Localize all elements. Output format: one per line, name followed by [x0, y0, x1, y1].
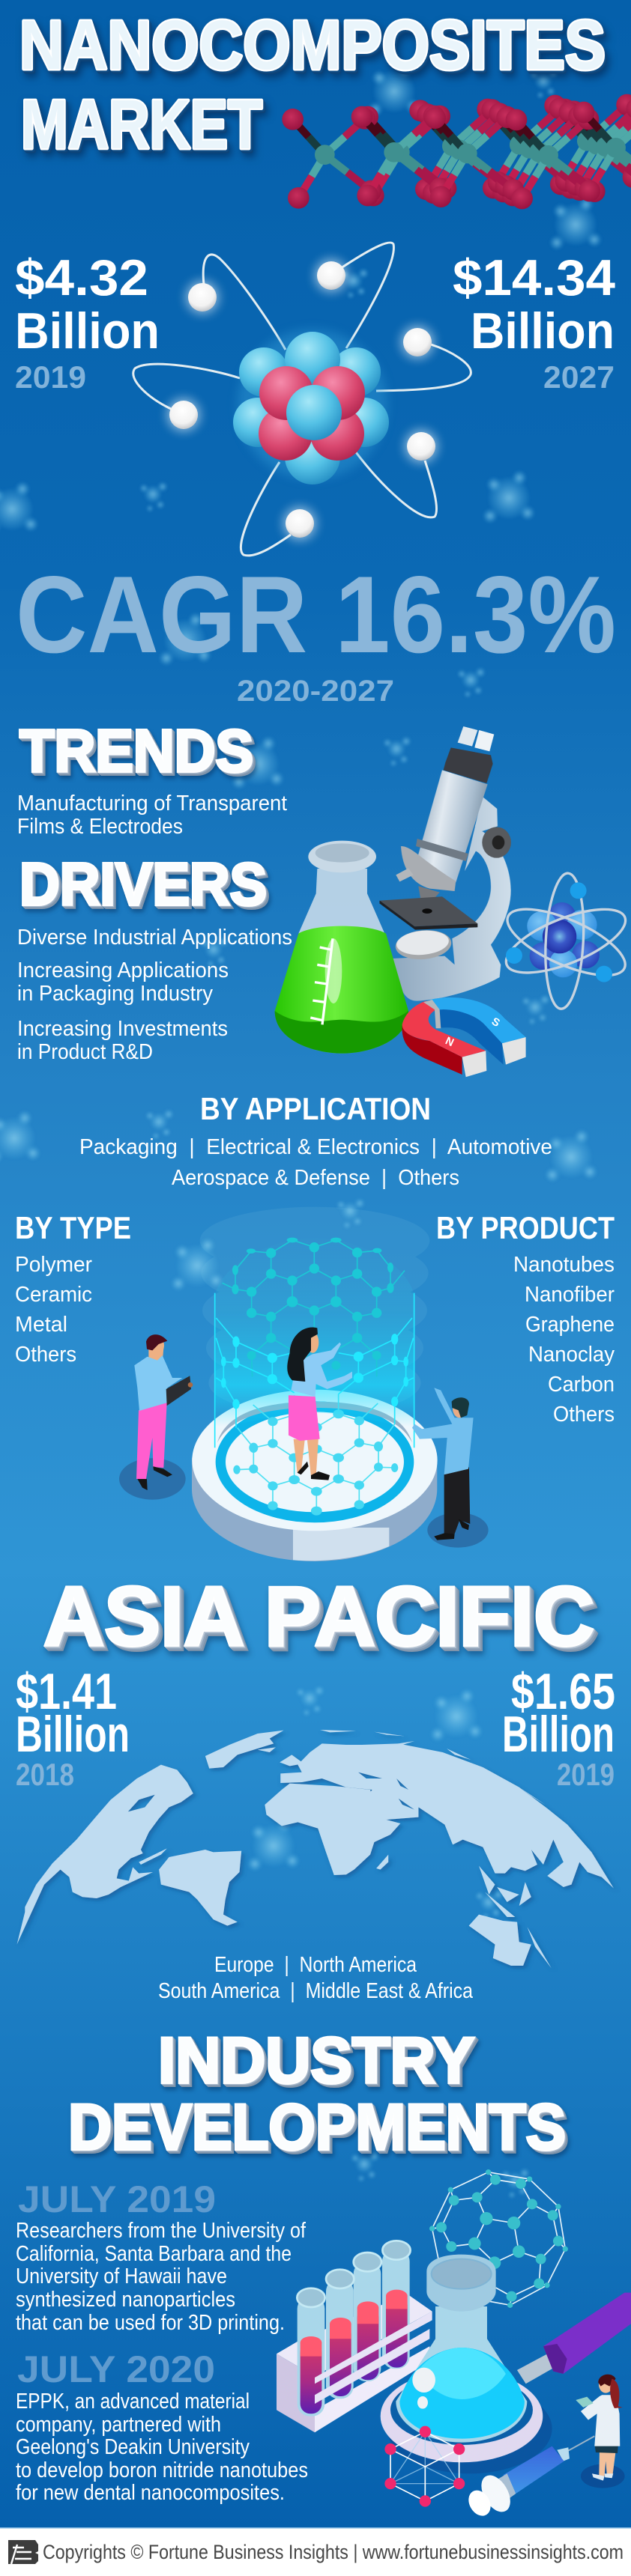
by product: Others	[553, 1403, 615, 1427]
development: July 2020: to develop boron nitride nanotubes	[16, 2458, 308, 2482]
by type	[15, 1210, 131, 1367]
stat: 2027 market size: $14.34	[453, 249, 615, 306]
crystal molecule illustration	[282, 94, 631, 209]
stat: 2018 regional size: $1.41	[16, 1663, 117, 1720]
drivers list	[17, 926, 292, 1064]
drivers list: Increasing Applications	[17, 959, 229, 982]
icon: syringe	[464, 2436, 594, 2520]
drivers list: Increasing Investments	[17, 1017, 228, 1041]
heading: drivers: DRIVERS	[19, 851, 267, 917]
development: July 2020: EPPK, an advanced material	[16, 2390, 250, 2414]
footer	[0, 2527, 631, 2576]
stat: 2027 market size: Billion	[471, 303, 615, 359]
title	[19, 6, 606, 163]
icon: scientist	[576, 2375, 625, 2488]
trends text	[17, 792, 287, 839]
development: July 2020: company, partnered with	[16, 2413, 221, 2437]
by type: Others	[15, 1343, 76, 1367]
icon: green flask	[275, 841, 408, 1054]
stat: 2019 market size	[15, 249, 160, 395]
trends text: Manufacturing of Transparent	[17, 792, 287, 815]
drivers list: Diverse Industrial Applications	[17, 926, 292, 950]
icon: crystal lattice	[384, 2426, 465, 2507]
CAGR period: 2020-2027	[237, 675, 394, 708]
by product: Graphene	[525, 1313, 615, 1337]
development: July 2020	[16, 2348, 308, 2505]
icon: blue atom	[498, 872, 631, 1009]
lab illustration: microscope, flask, magnet, atom	[275, 726, 631, 1077]
stat: 2018 regional size: Billion	[16, 1706, 130, 1763]
development: July 2019: that can be used for 3D printing.	[16, 2311, 285, 2335]
development: July 2019: California, Santa Barbara and the	[16, 2242, 292, 2266]
world map	[17, 1730, 614, 1968]
development: July 2019: synthesized nanoparticles	[16, 2288, 235, 2312]
stat: 2027 market size	[453, 249, 615, 395]
magnet pole labels: N	[444, 1035, 456, 1049]
stat: 2019 market size: Billion	[15, 303, 160, 359]
by product: Nanotubes	[513, 1253, 615, 1277]
by type: BY TYPE	[15, 1210, 131, 1245]
by product: Nanoclay	[528, 1343, 615, 1367]
by application: Packaging | Electrical & Electronics | Automotive	[79, 1135, 552, 1159]
lab illustration: test tubes, flask, buckyball, syringe, scientist	[277, 2169, 631, 2520]
development: July 2019: Researchers from the University of	[16, 2219, 307, 2243]
magnet pole labels: S	[489, 1015, 502, 1030]
drivers list: in Packaging Industry	[17, 982, 213, 1006]
drivers list: in Product R&D	[17, 1040, 153, 1064]
background molecule decorations	[0, 64, 601, 2198]
person: woman	[287, 1327, 352, 1480]
icon: company logo	[8, 2540, 38, 2564]
heading: Industry Developments: DEVELOPMENTS	[68, 2092, 566, 2163]
development: July 2019: JULY 2019	[18, 2178, 216, 2220]
by product: Nanofiber	[525, 1283, 615, 1307]
icon: horseshoe magnet	[402, 997, 526, 1077]
icon: purple magnifier handle	[517, 2293, 631, 2384]
by application: Aerospace & Defense | Others	[172, 1166, 459, 1190]
heading: Industry Developments: INDUSTRY	[158, 2025, 474, 2097]
icon: test tube rack	[277, 2241, 432, 2432]
regions list: South America | Middle East & Africa	[158, 1979, 474, 2003]
by product: Carbon	[548, 1373, 615, 1397]
development: July 2020: Geelong's Deakin University	[16, 2435, 250, 2459]
by type: Polymer	[15, 1253, 92, 1277]
regions list	[158, 1953, 474, 2003]
stat: 2018 regional size	[16, 1663, 130, 1792]
tube hexagon net: back layer	[223, 1238, 405, 1383]
icon: microscope	[380, 726, 511, 1001]
by application: BY APPLICATION	[200, 1091, 431, 1126]
development: July 2020: JULY 2020	[17, 2348, 215, 2390]
trends text: Films & Electrodes	[17, 815, 183, 839]
icon: buckyball	[429, 2169, 568, 2308]
stat: 2019 regional size: 2019	[557, 1757, 615, 1792]
tube hexagon net: front layer	[215, 1293, 414, 1448]
heading: trends: TRENDS	[19, 717, 253, 784]
by type: Ceramic	[15, 1283, 92, 1307]
floor hexagon net	[233, 1394, 398, 1516]
development: July 2019	[16, 2178, 307, 2335]
stat: 2019 market size: 2019	[15, 359, 86, 395]
by product	[436, 1210, 615, 1427]
icon: atom	[133, 243, 471, 556]
by type: Metal	[15, 1313, 67, 1337]
regions list: Europe | North America	[214, 1953, 417, 1977]
person: man at right	[412, 1388, 489, 1548]
heading: Industry Developments	[68, 2025, 566, 2163]
icon: blue round flask in magnifier	[381, 2255, 552, 2473]
stat: 2019 regional size	[502, 1663, 615, 1792]
heading: Asia Pacific: ASIA PACIFIC	[43, 1570, 594, 1663]
magnet pole labels	[444, 1015, 502, 1049]
person: man with tablet	[119, 1334, 193, 1500]
title: MARKET	[21, 85, 262, 163]
stat: 2027 market size: 2027	[543, 359, 615, 395]
nanotube platform illustration	[119, 1207, 489, 1561]
by application	[79, 1091, 552, 1190]
development: July 2020: for new dental nanocomposites.	[16, 2481, 285, 2505]
stat: 2018 regional size: 2018	[16, 1757, 74, 1792]
development: July 2019: University of Hawaii have	[16, 2264, 227, 2288]
stat: 2019 market size: $4.32	[15, 249, 148, 306]
